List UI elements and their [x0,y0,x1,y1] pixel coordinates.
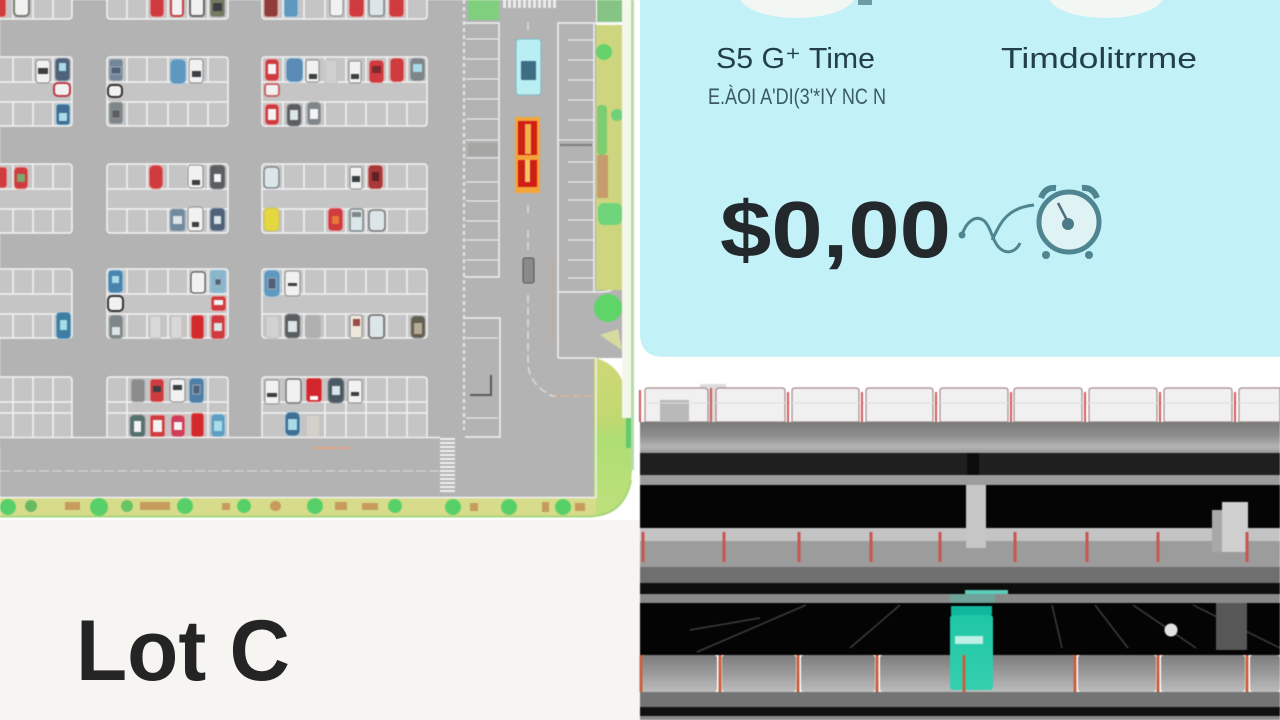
vehicle: small dark car [523,258,534,283]
circle icon right [1048,0,1164,18]
crosswalk [440,439,455,491]
lane: left column of bays [464,0,500,437]
label: left sub-heading: E.ÀOI A'DI(3'*IY NC N [708,84,886,109]
panel: Lot C label [0,520,640,720]
road: bottom lane [0,437,596,497]
orange road markings [553,260,594,396]
vehicle: cyan car [516,39,541,95]
panel: cost and time [640,0,1280,357]
deck wall level 2 [640,528,1280,541]
panel: parking lot plan [0,0,640,520]
red posts level 4 [641,655,1247,692]
small icon fragment [858,0,872,5]
lane: right column of bays [558,23,622,358]
beam 4 [640,594,1280,603]
label: right heading: Timdolitrrme [1001,43,1197,75]
beam 2 [640,475,1280,485]
top railing [640,384,1280,422]
parking row 2 [0,164,427,233]
parking row 0 [0,0,427,19]
lawn: lower right corner and bottom strip [0,358,634,517]
beam 6 [640,716,1280,720]
upper beam [640,422,1280,453]
dark gap level 3 [640,583,1280,594]
icon: clock with squiggle [958,188,1099,259]
vehicle: teal vehicle [950,590,1008,690]
parking row 3 [0,269,427,339]
white boundary and green edge at right of plan [622,0,634,470]
dark gap level 1 [640,453,1280,475]
trees along bottom strip [0,498,571,516]
deck level 2 [640,541,1280,567]
panel: multi-storey parking garage [640,357,1280,720]
green patch and crosswalk at top of lane [468,0,623,22]
concrete columns [966,485,1248,552]
road centre dashes [528,22,594,396]
dark interior level 4 [640,603,1280,655]
beam 3 [640,567,1280,583]
circle icon left [739,0,855,18]
lower panels [641,655,1280,692]
heading: Lot C: Lot C [76,603,290,699]
figure: $0,00: $0,00 [720,185,951,274]
red posts level 2 [643,532,1247,562]
vehicle: red truck [515,117,540,193]
grass strip, upper right [594,25,623,350]
dark interior level 2 [640,485,1280,529]
beam 5 [640,692,1280,707]
parking row 4 [0,377,427,447]
label: left heading: S5 G⁺ Time [716,43,875,75]
dark gap level 5 [640,707,1280,716]
parking row 1 [0,57,427,126]
